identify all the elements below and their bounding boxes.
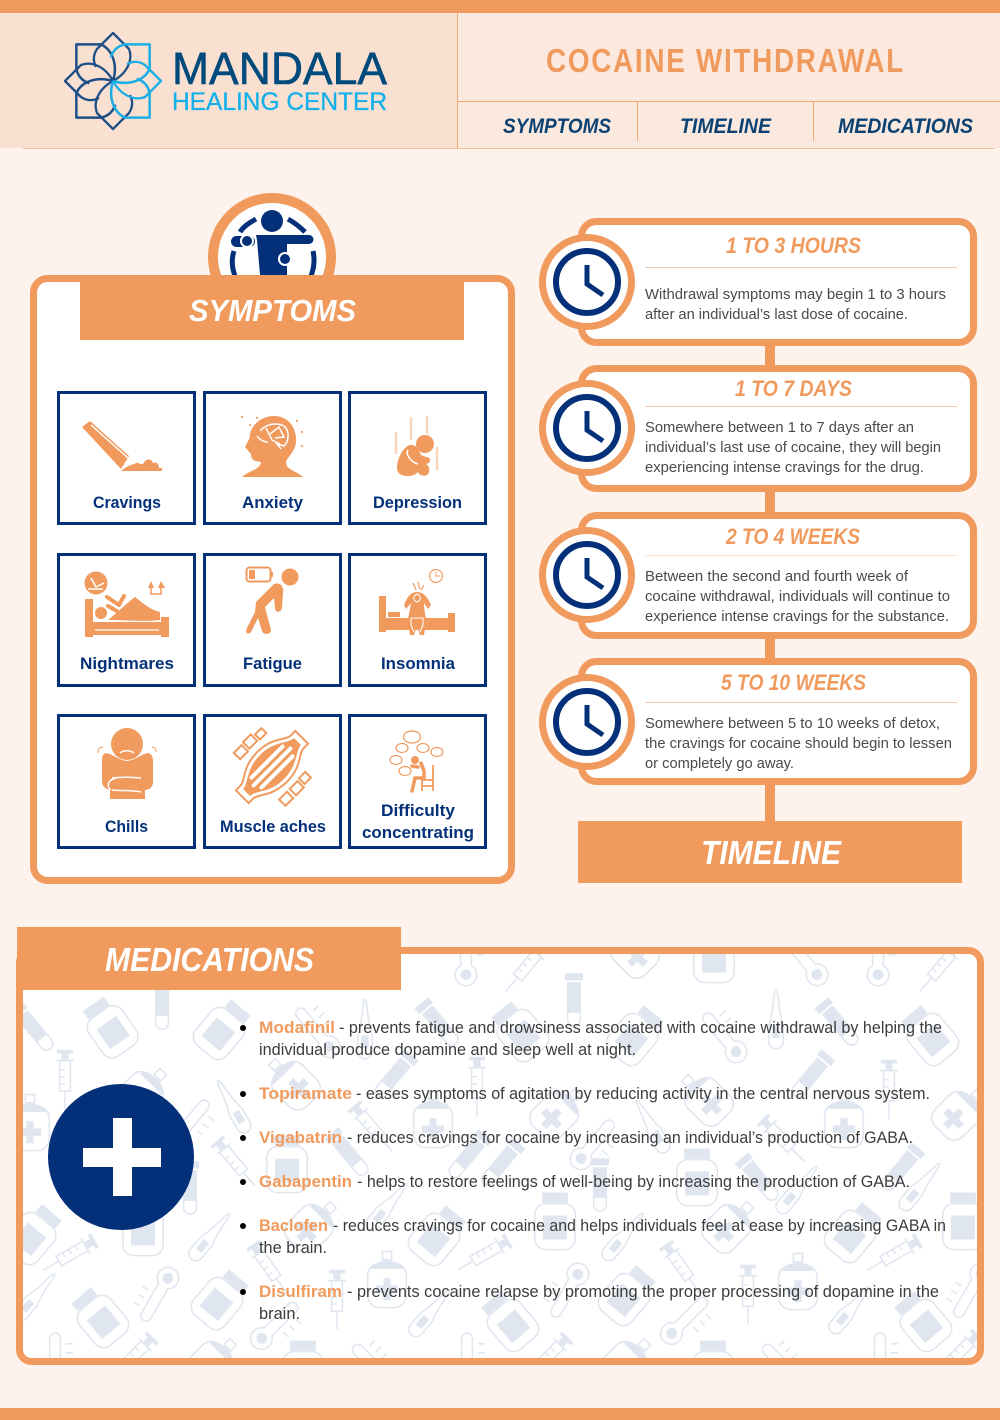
timeline step: 1 to 7 days (542, 368, 974, 488)
timeline step: 1 to 3 hours: Withdrawal symptoms may begin 1 to 3 hours (645, 287, 946, 303)
timeline step: 1 to 7 days: Somewhere between 1 to 7 days after an (645, 420, 914, 436)
card: chills: Chills (105, 818, 148, 836)
timeline step: 2 to 4 weeks: experience intense cravings for the substance. (645, 609, 949, 625)
title: COCAINE WITHDRAWAL (546, 42, 905, 79)
header (0, 0, 1000, 148)
card: nightmares: Nightmares (80, 655, 174, 673)
timeline (542, 222, 974, 883)
item: vigabatrin: Vigabatrin (259, 1129, 342, 1147)
heading: symptoms (80, 276, 464, 340)
item: disulfiram: Disulfiram (259, 1283, 342, 1301)
connector stem (765, 346, 775, 821)
item: topiramate: - eases symptoms of agitation by reducing activity in the central nervous system. (356, 1085, 930, 1103)
card: nightmares (58, 554, 194, 686)
heading: symptoms: SYMPTOMS (189, 293, 356, 328)
item: gabapentin: Gabapentin (259, 1173, 352, 1191)
medical pattern background (23, 954, 977, 1358)
panel border (20, 950, 980, 1362)
icon: nightmares (84, 572, 169, 637)
card: depression: Depression (373, 494, 462, 512)
item: disulfiram (240, 1283, 939, 1323)
card: fatigue: Fatigue (243, 655, 302, 673)
icon: chills (98, 728, 156, 799)
timeline step: 5 to 10 weeks: Somewhere between 5 to 10 weeks of detox, (645, 716, 940, 732)
card: anxiety (204, 392, 340, 524)
heading: timeline (578, 821, 962, 883)
timeline step: 1 to 7 days: experiencing intense cravings for the drug. (645, 460, 924, 476)
item: disulfiram: brain. (259, 1305, 300, 1323)
icon: muscle aches (215, 710, 328, 823)
timeline step: 1 to 3 hours (542, 222, 974, 342)
navigation labels: MEDICATIONS (838, 115, 973, 138)
heading: medications: MEDICATIONS (105, 941, 314, 978)
icon: clock (542, 678, 632, 766)
footer bar (0, 1408, 1000, 1420)
card: difficulty concentrating: concentrating (362, 824, 474, 842)
item: vigabatrin: - reduces cravings for cocaine by increasing an individual’s production of GABA. (347, 1129, 913, 1147)
icon: difficulty concentrating (390, 731, 443, 791)
card: insomnia (350, 554, 486, 686)
item: modafinil: individual produce dopamine and sleep well at night. (259, 1041, 636, 1059)
medication list (240, 1019, 946, 1323)
icon: insomnia (379, 570, 455, 635)
heading: medications (17, 927, 401, 990)
timeline step: 5 to 10 weeks: or completely go away. (645, 756, 794, 772)
item: baclofen (240, 1217, 946, 1257)
item: gabapentin: - helps to restore feelings of well-being by increasing the production of GABA. (357, 1173, 910, 1191)
item: modafinil: Modafinil (259, 1019, 335, 1037)
icon: medical plus (48, 1084, 194, 1230)
timeline step: 1 to 7 days: individual’s last use of cocaine, they will begin (645, 440, 941, 456)
panel: symptoms (34, 276, 512, 880)
timeline step: 2 to 4 weeks: 2 TO 4 WEEKS (725, 524, 860, 549)
card: difficulty concentrating (350, 716, 486, 848)
card: muscle aches: Muscle aches (220, 818, 326, 836)
item: disulfiram: - prevents cocaine relapse by promoting the proper processing of dopamine in the (347, 1283, 939, 1301)
icon: clock (542, 530, 632, 620)
item: topiramate: Topiramate (259, 1085, 352, 1103)
icon: clock (542, 238, 632, 326)
timeline step: 1 to 3 hours: 1 TO 3 HOURS (726, 233, 861, 258)
timeline step: 2 to 4 weeks: Between the second and fourth week of (645, 569, 909, 585)
icon: clock (542, 384, 632, 472)
timeline step: 5 to 10 weeks: 5 TO 10 WEEKS (721, 670, 866, 695)
logo (62, 30, 387, 132)
navigation labels (503, 115, 973, 138)
card: insomnia: Insomnia (381, 655, 456, 673)
card: anxiety: Anxiety (242, 494, 304, 512)
card: cravings: Cravings (93, 494, 161, 512)
item: modafinil: - prevents fatigue and drowsiness associated with cocaine withdrawal by helping the (339, 1019, 942, 1037)
panel: medications (16, 927, 984, 1365)
timeline step: 1 to 7 days: 1 TO 7 DAYS (735, 376, 852, 401)
card: difficulty concentrating: Difficulty (381, 802, 456, 820)
card: fatigue (204, 554, 340, 686)
icon: symptoms body badge (208, 193, 336, 275)
card: cravings (58, 392, 194, 524)
item: modafinil (240, 1019, 942, 1059)
card: chills (58, 716, 194, 848)
icon: fatigue (246, 568, 298, 634)
icon: cravings (82, 421, 162, 471)
timeline step: 2 to 4 weeks (542, 516, 974, 636)
navigation labels: SYMPTOMS (503, 115, 611, 138)
logo: HEALING CENTER (172, 88, 387, 116)
timeline step: 1 to 3 hours: after an individual’s last dose of cocaine. (645, 307, 908, 323)
logo wordmark: MANDALA (172, 43, 387, 94)
item: baclofen: the brain. (259, 1239, 327, 1257)
timeline step: 5 to 10 weeks: the cravings for cocaine should begin to lessen (645, 736, 952, 752)
item: baclofen: Baclofen (259, 1217, 328, 1235)
card: depression (350, 392, 486, 524)
heading: timeline: TIMELINE (701, 834, 842, 871)
timeline step: 2 to 4 weeks: cocaine withdrawal, individuals will continue to (645, 589, 950, 605)
item: baclofen: - reduces cravings for cocaine and helps individuals feel at ease by increasing GABA in (333, 1217, 946, 1235)
card: muscle aches (204, 710, 340, 848)
navigation labels: TIMELINE (680, 115, 772, 138)
icon: anxiety (242, 416, 303, 477)
timeline step: 5 to 10 weeks (542, 662, 974, 782)
icon: depression (396, 416, 437, 476)
logo mandala mark (62, 30, 164, 132)
